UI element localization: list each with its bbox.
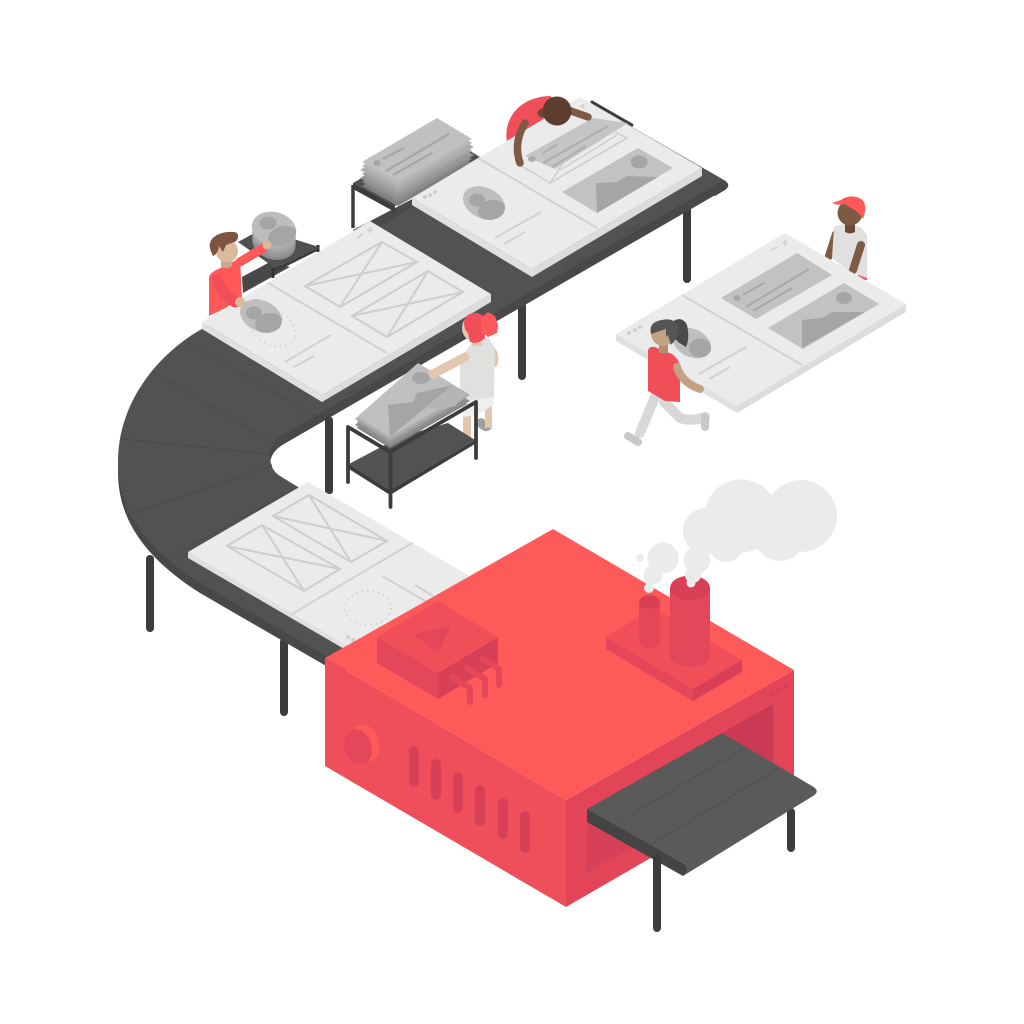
factory exit opening: [587, 704, 773, 872]
person: cap, behind carried sheet: [829, 196, 867, 280]
sheet: centre-left wireframe page: [202, 221, 491, 402]
person: red shirt left, body: [209, 232, 272, 316]
output conveyor legs: [787, 808, 795, 852]
status dots: [768, 684, 788, 696]
illustration: isometric wireframe production line: [118, 96, 906, 932]
sheet: bottom-left wireframe page: [188, 482, 480, 657]
knob: [340, 721, 384, 768]
person: leaning over top sheet, body: [506, 96, 562, 144]
small table with avatar stack: [238, 207, 319, 293]
person: running with sheet: [628, 319, 705, 442]
person: red hair, dress and legs: [460, 312, 498, 437]
chimneys on base: [606, 576, 742, 701]
person: red shirt left, near arm: [217, 280, 245, 307]
centre table with image stack: [348, 363, 476, 507]
play button chip: [377, 601, 499, 702]
sheet: top wireframe page: [412, 97, 702, 277]
person: red hair, arm: [433, 357, 465, 374]
conveyor legs: [146, 206, 691, 716]
person: leaning over top sheet, head and arms: [517, 96, 588, 163]
factory body: [325, 529, 794, 907]
back table with sheet stack: [353, 118, 480, 245]
output conveyor: [587, 733, 817, 876]
vents: [409, 746, 530, 853]
conveyor leg: centre: [325, 417, 333, 494]
smoke: [636, 480, 837, 593]
output conveyor leg: front: [653, 855, 661, 932]
sheet: carried wireframe page: [616, 233, 906, 413]
conveyor belt: [118, 102, 728, 674]
